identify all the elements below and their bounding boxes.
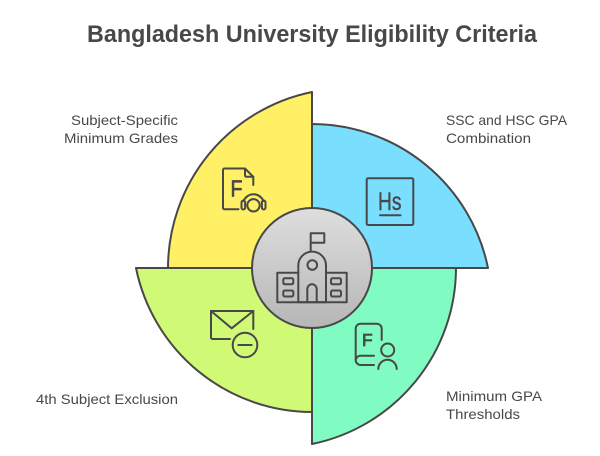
label: SSC and HSC GPA combination: SSC and HSC GPA: [446, 112, 568, 128]
icon: envelope with minus: [211, 311, 257, 357]
label: SSC and HSC GPA combination: Combination: [446, 130, 531, 146]
title: Bangladesh University Eligibility Criteria: [87, 21, 538, 48]
icon: contact book with person: [356, 324, 397, 369]
center circle: [252, 208, 372, 328]
label: 4th subject exclusion: 4th Subject Exclusion: [36, 391, 178, 407]
label: minimum GPA thresholds: Thresholds: [446, 406, 520, 422]
icon: Hs box: Hs: [378, 188, 402, 216]
panel: SSC and HSC GPA segment: [312, 124, 488, 268]
panel: minimum GPA thresholds segment: [312, 268, 456, 444]
icon: school building: [277, 233, 347, 302]
label: minimum GPA thresholds: Minimum GPA: [446, 388, 543, 404]
label: subject-specific minimum grades: Minimum Grades: [64, 130, 178, 146]
icon: Hs box: [367, 178, 413, 225]
panel: 4th subject exclusion segment: [136, 268, 312, 412]
icon: document with headset: F: [230, 176, 242, 202]
panel: subject-specific minimum grades segment: [168, 92, 312, 268]
icon: document with headset: [223, 168, 266, 212]
label: subject-specific minimum grades: Subject-Specific: [71, 112, 178, 128]
icon: contact book with person: F: [362, 330, 373, 350]
